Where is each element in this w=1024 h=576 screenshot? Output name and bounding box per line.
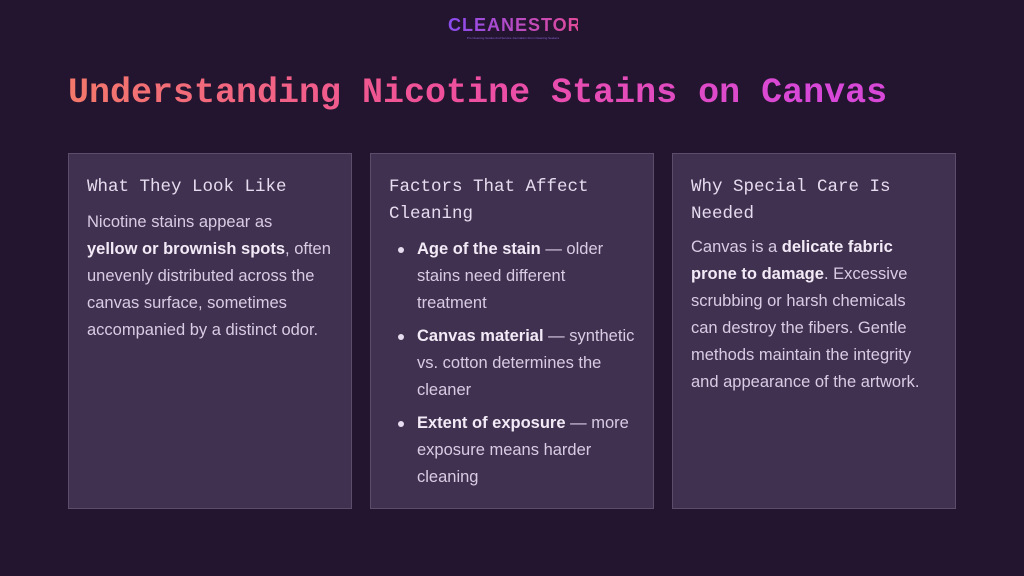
- heading: What They Look Like: [87, 177, 287, 197]
- bullet list: Age of the stain — older stains need different treatment: [417, 240, 603, 312]
- panel: factors: [370, 153, 654, 509]
- text block: accompanied by a distinct odor.: [87, 321, 318, 339]
- text block: canvas surface, sometimes: [87, 294, 287, 312]
- heading: Factors That Affect Cleaning: [389, 177, 589, 224]
- logo: Pro Cleaning Guides And Service Journalism From Cleaning Seekers: [467, 36, 559, 40]
- logo: CLEANESTOR: [448, 15, 582, 35]
- heading: Why Special Care Is Needed: [691, 177, 891, 224]
- panel: what they look like: [68, 153, 352, 509]
- title: Understanding Nicotine Stains on Canvas: [68, 73, 887, 113]
- bullet list: Canvas material — synthetic vs. cotton determines the cleaner: [417, 327, 634, 399]
- text block: [87, 213, 331, 339]
- text block: Nicotine stains appear as: [87, 213, 272, 231]
- text block: Canvas is a delicate fabric prone to damage. Excessive scrubbing or harsh chemicals can destroy the fibers. Gentle methods maintain the integrity and appearance of the artwork.: [691, 238, 919, 391]
- text block: yellow or brownish spots, often: [87, 240, 331, 258]
- text block: unevenly distributed across the: [87, 267, 314, 285]
- bullet list: Extent of exposure — more exposure means harder cleaning: [417, 414, 629, 486]
- bullet list: [398, 240, 634, 486]
- panel: special care: [672, 153, 956, 509]
